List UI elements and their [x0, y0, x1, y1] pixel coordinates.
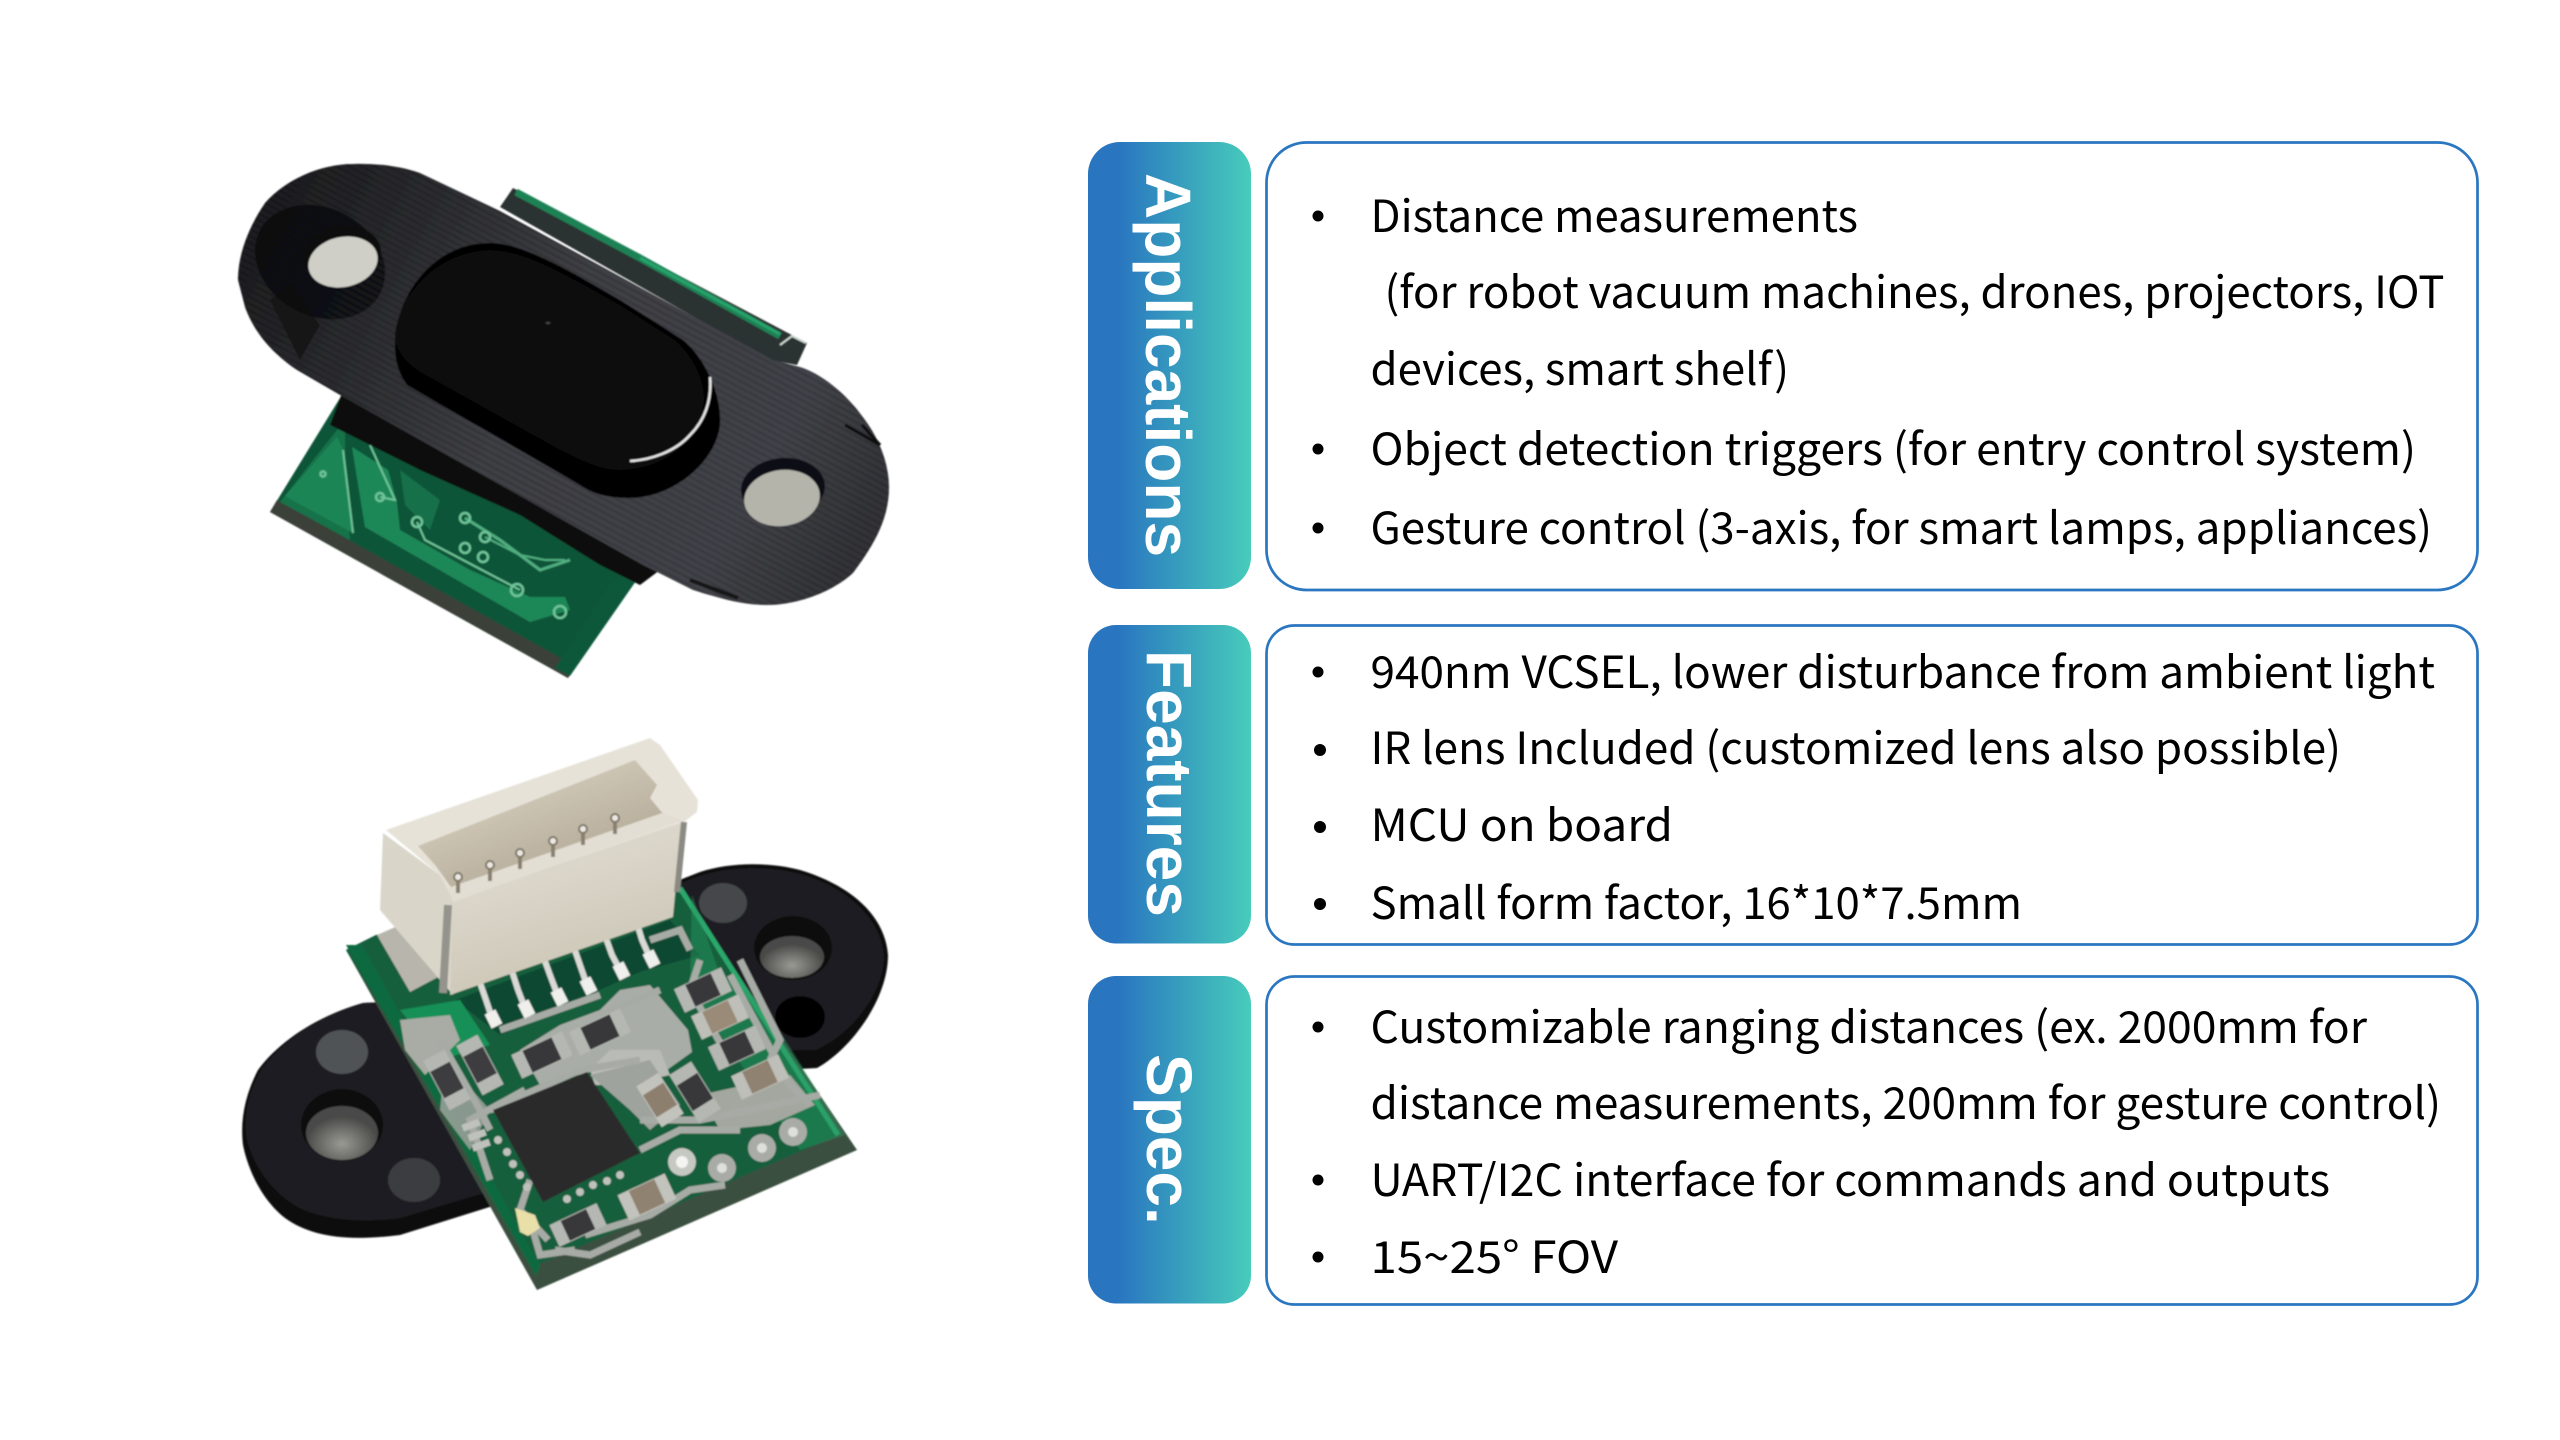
- black plate underside shadow: [330, 385, 660, 585]
- list box: Features: MCU on board: [1370, 790, 1673, 854]
- rear PCB edge: [500, 188, 807, 365]
- list box: Applications: devices, smart shelf): [1370, 334, 1789, 398]
- tab: Features: [1088, 625, 1251, 944]
- solder pins: [478, 917, 655, 1026]
- black mounting plate: [235, 164, 889, 605]
- tab: Spec.: Spec.: [1133, 1054, 1205, 1225]
- front PCB with traces: [270, 398, 648, 678]
- list box: Applications: Distance measurements: [1370, 181, 1858, 245]
- product photo: sensor module lens side: [235, 164, 889, 678]
- white connector: [377, 738, 698, 995]
- panel: Spec.: [1088, 976, 2478, 1304]
- left lobe holes: [301, 1030, 440, 1202]
- QFN chip: [493, 1072, 640, 1202]
- SMD components: [423, 967, 789, 1247]
- connector pins: [454, 814, 619, 893]
- PCB board: [346, 888, 857, 1290]
- list box: Features: Small form factor, 16*10*7.5mm: [1370, 868, 2022, 932]
- tab: Features: Features: [1133, 650, 1205, 917]
- glossy IR lens: [395, 243, 720, 498]
- tab: Applications: [1088, 142, 1251, 589]
- list box: Applications: (for robot vacuum machines, drones, projectors, IOT: [1384, 257, 2444, 321]
- list box: Features: [1266, 626, 2478, 944]
- solder and copper traces: [400, 930, 820, 1255]
- right metal contact: [739, 454, 827, 531]
- product photo: sensor module PCB side: [242, 738, 888, 1290]
- tab: Applications: Applications: [1132, 173, 1204, 557]
- list box: Spec.: [1266, 976, 2478, 1304]
- right lobe holes: [699, 883, 832, 1038]
- left metal contact: [299, 221, 385, 294]
- list box: Applications: Object detection triggers (for entry control system): [1370, 414, 2416, 478]
- black mounting plate: [242, 864, 888, 1238]
- tab: Spec.: [1088, 976, 1251, 1304]
- chip pads: [461, 1119, 624, 1203]
- list box: Spec.: UART/I2C interface for commands and outputs: [1370, 1145, 2330, 1209]
- panel: Applications: [1088, 142, 2478, 590]
- list box: Spec.: Customizable ranging distances (ex. 2000mm for: [1370, 992, 2368, 1056]
- list box: Spec.: distance measurements, 200mm for gesture control): [1370, 1068, 2441, 1132]
- list box: Spec.: 15~25° FOV: [1370, 1222, 1619, 1286]
- list box: Applications: Gesture control (3-axis, for smart lamps, appliances): [1370, 493, 2432, 557]
- round pads and marker dot: [515, 1118, 807, 1236]
- panel: Features: [1088, 625, 2478, 944]
- list box: Applications: [1266, 142, 2478, 590]
- list box: Features: 940nm VCSEL, lower disturbance from ambient light: [1370, 637, 2435, 701]
- list box: Features: IR lens Included (customized lens also possible): [1370, 713, 2341, 777]
